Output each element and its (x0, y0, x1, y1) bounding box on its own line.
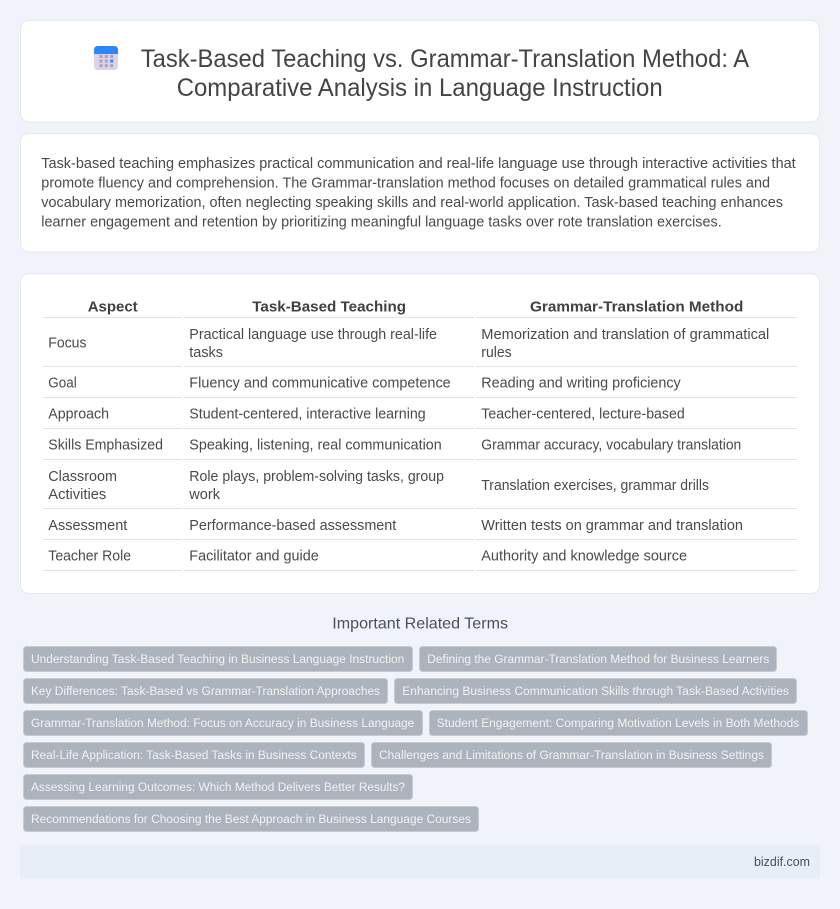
tag row 3: Grammar-Translation Method: Focus on Accuracy in Business Language (31, 716, 414, 730)
row: teacher role: Facilitator and guide (189, 549, 319, 565)
table header row: Aspect (88, 299, 138, 316)
row: focus: Practical language use through real-life (189, 327, 437, 343)
tag row 5: Assessing Learning Outcomes: Which Method Delivers Better Results? (31, 780, 405, 794)
row: assessment: Written tests on grammar and translation (481, 518, 743, 534)
tag row 4 (24, 742, 772, 768)
intro paragraph: Task-based teaching emphasizes practical communication and real-life language use through interactive activities that (41, 156, 796, 172)
tag row 6: Recommendations for Choosing the Best Approach in Business Language Courses (31, 812, 471, 826)
title (141, 45, 749, 102)
row: classroom activities: work (188, 487, 221, 503)
footer bar (20, 845, 820, 879)
table header row (43, 299, 797, 318)
tag row 2: Enhancing Business Communication Skills through Task-Based Activities (402, 684, 789, 698)
row: assessment: Assessment (48, 518, 127, 534)
table header row: Grammar-Translation Method (530, 299, 743, 316)
tag row 6 (24, 806, 478, 832)
intro paragraph: learner engagement and retention by prioritizing meaningful language tasks over rote translation exercises. (41, 214, 722, 230)
row: skills emphasized: Skills Emphasized (48, 438, 163, 454)
related term tags (24, 646, 808, 832)
icon: calendar (94, 46, 118, 70)
intro paragraph (41, 156, 796, 230)
row: assessment: Performance-based assessment (189, 518, 396, 534)
row: approach (43, 406, 797, 429)
footer bar: bizdif.com (754, 854, 810, 869)
row: classroom activities: Role plays, problem-solving tasks, group (189, 469, 444, 485)
row: goal: Goal (48, 376, 77, 392)
row: approach: Teacher-centered, lecture-based (481, 406, 685, 422)
row: goal: Reading and writing proficiency (481, 376, 681, 392)
title: Task-Based Teaching vs. Grammar-Translation Method: A (141, 45, 749, 73)
row: classroom activities (43, 469, 797, 509)
row: focus: tasks (189, 345, 223, 361)
row: teacher role (43, 549, 797, 571)
row: approach: Approach (48, 406, 109, 422)
row: skills emphasized: Speaking, listening, real communication (189, 438, 442, 454)
tag row 4: Real-Life Application: Task-Based Tasks in Business Contexts (31, 748, 357, 762)
row: assessment (43, 518, 797, 540)
row: skills emphasized (43, 438, 797, 460)
row: focus: rules (481, 345, 512, 361)
row: teacher role: Teacher Role (48, 549, 131, 565)
tag row 1: Defining the Grammar-Translation Method for Business Learners (427, 652, 769, 666)
tag row 5 (24, 774, 412, 800)
tag row 1 (24, 646, 776, 672)
heading: important related terms: Important Related Terms (332, 615, 508, 632)
intro paragraph: vocabulary memorization, often neglecting speaking skills and real-world application. Task-based teaching enhances (41, 195, 783, 211)
panel: comparison table (20, 274, 820, 594)
title: Comparative Analysis in Language Instruction (177, 74, 663, 102)
intro paragraph: promote fluency and comprehension. The Grammar-translation method focuses on detailed grammatical rules and (41, 175, 770, 191)
row: classroom activities: Translation exercises, grammar drills (481, 478, 709, 494)
table header row: Task-Based Teaching (252, 299, 406, 316)
panel: intro text (20, 134, 820, 252)
row: focus: Focus (48, 336, 86, 352)
tag row 1: Understanding Task-Based Teaching in Business Language Instruction (31, 652, 404, 666)
row: approach: Student-centered, interactive learning (189, 406, 426, 422)
row: focus (43, 327, 797, 367)
row: classroom activities: Classroom (48, 469, 117, 485)
tag row 3: Student Engagement: Comparing Motivation Levels in Both Methods (437, 716, 799, 730)
row: skills emphasized: Grammar accuracy, vocabulary translation (481, 438, 741, 454)
tag row 2 (24, 678, 796, 704)
row: teacher role: Authority and knowledge source (481, 549, 687, 565)
row: goal (43, 376, 797, 398)
row: focus: Memorization and translation of grammatical (481, 327, 769, 343)
tag row 2: Key Differences: Task-Based vs Grammar-Translation Approaches (31, 684, 380, 698)
row: goal: Fluency and communicative competence (189, 376, 451, 392)
panel: header (20, 20, 820, 122)
tag row 3 (24, 710, 808, 736)
tag row 4: Challenges and Limitations of Grammar-Translation in Business Settings (379, 748, 764, 762)
row: classroom activities: Activities (48, 487, 106, 503)
